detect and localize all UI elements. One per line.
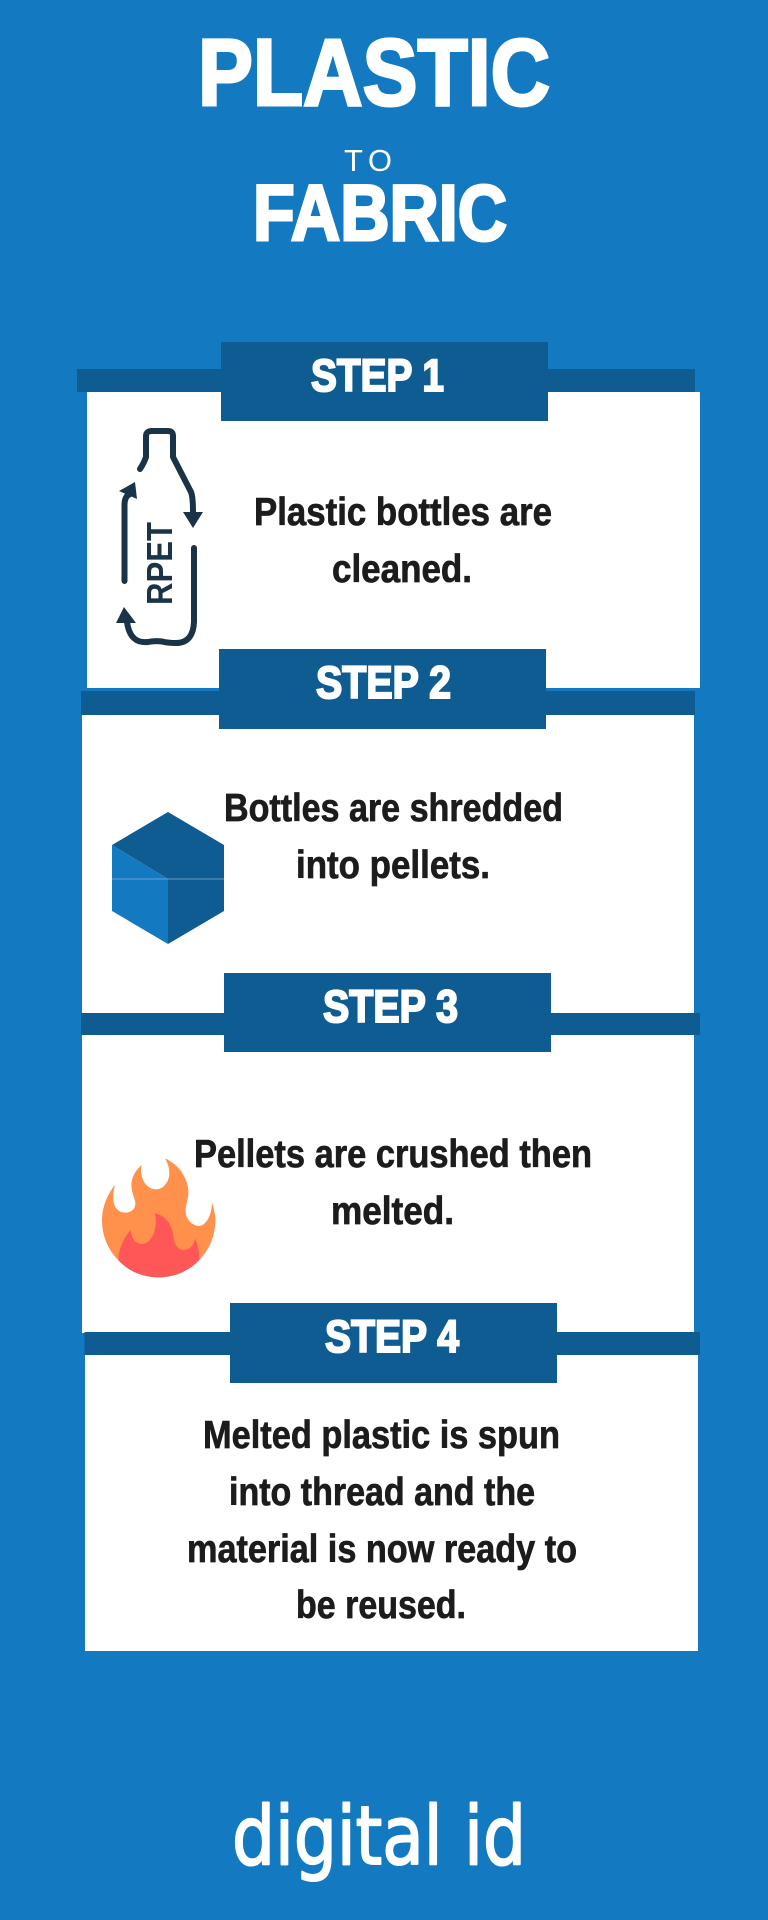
- panel: step 4: [84, 1303, 700, 1651]
- title line: fabric: FABRIC: [253, 168, 507, 257]
- title line: to: TO: [344, 143, 392, 178]
- text: step 4 description: material is now ready to: [187, 1528, 577, 1571]
- text: step 3 description: melted.: [331, 1190, 454, 1233]
- logo: digital id: digital id: [232, 1790, 526, 1884]
- heading: step 1: STEP 1: [311, 350, 444, 401]
- heading: step 4: STEP 4: [325, 1311, 459, 1362]
- text: step 4 description: into thread and the: [229, 1471, 535, 1514]
- text: step 1 description: cleaned.: [332, 548, 472, 591]
- icon: recycled PET bottle: RPET: [139, 522, 180, 605]
- icon: recycled PET bottle: [116, 431, 203, 643]
- text: step 1 description: [254, 491, 552, 591]
- heading: step 2: STEP 2: [316, 657, 451, 708]
- text: step 4 description: Melted plastic is spun: [203, 1414, 560, 1457]
- title: [198, 20, 550, 257]
- text: step 2 description: into pellets.: [296, 844, 490, 887]
- panel: step 1: [77, 342, 700, 688]
- icon: flame: [102, 1158, 215, 1277]
- panel: step 3: [81, 973, 700, 1333]
- text: step 4 description: be reused.: [296, 1584, 466, 1627]
- text: step 2 description: Bottles are shredded: [224, 787, 563, 830]
- text: step 4 description: [187, 1414, 577, 1627]
- icon: pellet cube: [112, 812, 224, 944]
- text: step 2 description: [224, 787, 563, 887]
- text: step 3 description: [194, 1133, 592, 1233]
- title line: plastic: PLASTIC: [198, 20, 550, 126]
- text: step 3 description: Pellets are crushed then: [194, 1133, 592, 1176]
- heading: step 3: STEP 3: [323, 981, 458, 1032]
- panel: step 2: [81, 649, 695, 1013]
- text: step 1 description: Plastic bottles are: [254, 491, 552, 534]
